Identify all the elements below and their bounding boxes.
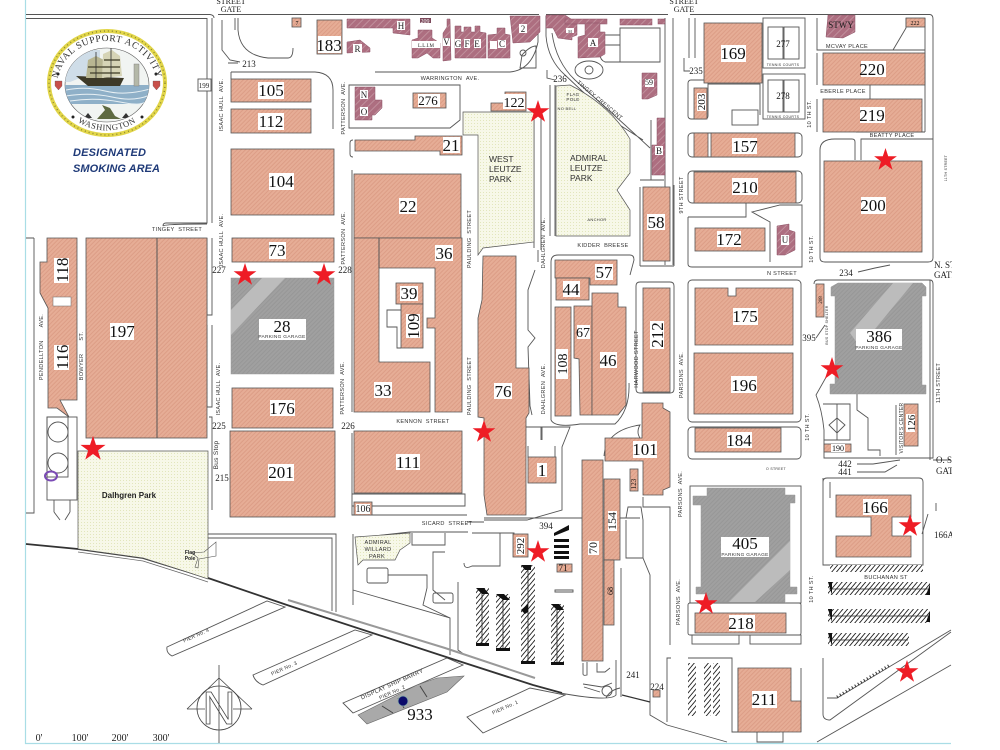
building number labels: 58: [648, 213, 664, 232]
building number labels: 209: [420, 19, 430, 25]
building number labels: 196: [731, 376, 757, 395]
building number labels: 108: [556, 354, 571, 374]
gate and facility callouts: 235: [689, 66, 703, 76]
gate and facility callouts: 225: [212, 421, 226, 431]
street labels: BOWYER ST.: [79, 332, 85, 380]
building number labels: 36: [436, 244, 452, 263]
street labels: POLE: [566, 97, 580, 102]
street labels: KENNON STREET: [396, 419, 450, 425]
parks: [78, 85, 630, 579]
gate and facility callouts: GATE: [221, 5, 241, 14]
street labels: 11TH STREET: [944, 154, 948, 181]
building number labels: 176: [269, 399, 295, 418]
gate and facility callouts: 395: [802, 333, 816, 343]
building number labels: 46: [600, 351, 616, 370]
gate and facility callouts: GATE: [674, 5, 694, 14]
building number labels: 166: [862, 498, 888, 517]
building number labels: 104: [268, 172, 294, 191]
park names: PARK: [369, 554, 385, 560]
parking garage 405: PARKING GARAGE: [721, 552, 769, 558]
street labels: TENNIS COURTS: [767, 63, 800, 67]
park names: Flag: [185, 550, 195, 556]
street labels: 11TH STREET: [936, 363, 942, 403]
gate and facility callouts: GATE: [934, 270, 957, 280]
title: designated smoking area: [73, 147, 160, 175]
historic building letters: R: [354, 44, 361, 54]
park names: Dalhgren Park: [102, 491, 157, 500]
historic building letters: V: [443, 37, 450, 47]
street labels: EBERLE PLACE: [820, 89, 866, 95]
building number labels: 278: [776, 91, 790, 101]
building number labels: 126: [906, 414, 918, 431]
park names: PARK: [489, 174, 512, 184]
gate and facility callouts: 441: [838, 467, 852, 477]
street labels: ANCHOR: [587, 217, 607, 222]
parking garage 28: [231, 278, 334, 374]
gate and facility callouts: 234: [839, 268, 853, 278]
building number labels: 106: [356, 504, 370, 515]
street labels: TENNIS COURTS: [767, 115, 800, 119]
piers and waterfront: [26, 544, 650, 733]
historic maroon buildings: [347, 15, 855, 255]
building number labels: 116: [53, 345, 72, 369]
street labels: PIER No. 4: [182, 627, 210, 644]
building number labels: 211: [752, 690, 776, 709]
Admiral Willard Park: [355, 533, 410, 565]
historic building letters: H: [398, 21, 405, 31]
park names: LEUTZE: [489, 164, 522, 174]
street labels: PATTERSON AVE.: [341, 211, 347, 265]
street labels: NO BELL: [558, 106, 577, 111]
building number labels: 200: [860, 196, 886, 215]
building number labels: 183: [316, 36, 342, 55]
building number labels: 218: [728, 614, 754, 633]
street labels: PARSONS AVE.: [678, 471, 684, 517]
street labels: BUS STOP SHELTER: [825, 305, 829, 345]
building number labels: 175: [732, 307, 758, 326]
parking garage 386: [830, 283, 926, 394]
purple marker: [45, 472, 57, 480]
street labels: MCVAY PLACE: [826, 44, 868, 50]
gate and facility callouts: [198, 0, 959, 692]
building number labels: 169: [720, 44, 746, 63]
parking garage 386: 386: [866, 327, 892, 346]
parking garage 28: PARKING GARAGE: [258, 334, 306, 340]
street labels: VISITOR'S CENTER: [899, 402, 905, 453]
building number labels: 70: [586, 542, 600, 554]
parking garage 405: 405: [732, 534, 758, 553]
seal: Naval Support Activity Washington: [47, 29, 167, 137]
street labels: DAHLGREN AVE.: [541, 363, 547, 414]
building number labels: 71: [558, 563, 568, 573]
street labels: TINGEY STREET: [152, 227, 202, 233]
building number labels: 277: [776, 39, 790, 49]
scale bar: 300': [153, 733, 170, 744]
historic building letters: M: [568, 29, 572, 34]
street labels: BUCHANAN ST: [864, 575, 908, 581]
building number labels: 68: [606, 587, 615, 595]
historic building letters: C: [499, 39, 505, 49]
street labels: DAHLGREN AVE.: [541, 217, 547, 268]
building number labels: 39: [400, 284, 418, 303]
street labels: O STREET: [766, 467, 787, 471]
building number labels: 118: [53, 258, 72, 282]
building number labels: 21: [442, 136, 460, 155]
building number labels: 57: [596, 263, 613, 282]
street labels: Bus Stop: [213, 441, 220, 469]
park names: [102, 153, 608, 568]
park names: WILLARD: [365, 547, 391, 553]
street labels: HARWOOD STREET: [634, 330, 640, 388]
gate and facility callouts: N. ST: [934, 260, 956, 270]
building number labels: 201: [268, 463, 294, 482]
street labels: PIER No. 3: [270, 660, 298, 677]
building number labels: 1: [538, 461, 546, 480]
building number labels: 190: [832, 444, 844, 453]
building number labels: 101: [632, 440, 658, 459]
parking lot hatching: [476, 525, 930, 716]
Admiral Leutze Park: [556, 85, 630, 236]
Dahlgren Park: [78, 451, 208, 579]
park names: LEUTZE: [570, 163, 603, 173]
West Leutze Park: [463, 112, 534, 255]
park names: ADMIRAL: [365, 540, 391, 546]
display ship Barry: 933: [407, 705, 433, 724]
historic building letters: O: [361, 107, 368, 117]
gate and facility callouts: 215: [215, 473, 229, 483]
building number labels: 73: [268, 241, 286, 260]
street labels: PAULDING STREET: [467, 357, 473, 415]
historic building letters: A: [590, 38, 597, 48]
gate and facility callouts: 228: [338, 265, 352, 275]
building number labels: 210: [732, 178, 758, 197]
historic building letters: E: [474, 39, 480, 49]
seal: Naval Support Activity Washington: WASHINGTON: [80, 117, 135, 130]
building number labels: 44: [562, 280, 580, 299]
street labels: PENDELLTON AVE.: [39, 314, 45, 380]
building number labels: 67: [576, 326, 590, 341]
building number labels: 109: [404, 313, 423, 339]
street labels: N STREET: [767, 271, 797, 277]
street labels: SICARD STREET: [422, 521, 473, 527]
display ship Barry: [358, 676, 464, 724]
parking garage 405: [693, 488, 797, 602]
scale bar: 100': [72, 733, 89, 744]
building number labels: 111: [396, 453, 420, 472]
building number labels: 112: [259, 112, 283, 131]
gate and facility callouts: 442: [838, 459, 852, 469]
gate and facility callouts: GATE: [936, 466, 959, 476]
historic building letters: U: [782, 235, 789, 245]
building number labels: 7: [296, 21, 298, 27]
scale bar: 200': [112, 733, 129, 744]
building number labels: 33: [374, 381, 392, 400]
gate and facility callouts: 199: [199, 82, 210, 90]
historic building letters: B: [656, 146, 662, 156]
scale bar: [36, 733, 170, 744]
seal: Naval Support Activity Washington: NAVAL SUPPORT ACTIVITY: [52, 34, 162, 78]
gate and facility callouts: 166A: [934, 530, 954, 540]
park names: ADMIRAL: [570, 153, 608, 163]
building number labels: 212: [648, 322, 667, 348]
street labels: PIER No. 1: [491, 699, 519, 716]
gate and facility callouts: 224: [650, 682, 664, 692]
street labels: WARRINGTON AVE.: [421, 76, 480, 82]
street labels: DISPLAY SHIP BARRY: [360, 668, 425, 701]
park names: Pole: [185, 556, 195, 562]
street labels: 10 TH ST.: [809, 235, 815, 263]
north arrow: N: [202, 682, 236, 734]
gate and facility callouts: 236: [553, 74, 567, 84]
building number labels: 154: [605, 512, 619, 530]
historic building letters: N: [361, 90, 368, 100]
street labels: PAULDING STREET: [467, 210, 473, 268]
building number labels: 123: [630, 478, 638, 489]
parking garage 386: PARKING GARAGE: [855, 345, 903, 351]
street labels: 10 TH ST.: [805, 413, 811, 441]
building number labels: 157: [732, 137, 758, 156]
building number labels: [53, 19, 920, 709]
historic building letters: [353, 20, 854, 245]
historic building letters: G: [455, 39, 462, 49]
gate and facility callouts: 394: [539, 521, 553, 531]
building number labels: 292: [515, 538, 527, 554]
parking garage 28: 28: [274, 317, 290, 336]
building number labels: 184: [726, 431, 752, 450]
gate and facility callouts: O. ST: [936, 455, 958, 465]
building number labels: 172: [716, 230, 742, 249]
street labels: FLAG: [567, 92, 580, 97]
gate and facility callouts: 226: [341, 421, 355, 431]
street labels: 10 TH ST.: [807, 100, 813, 128]
park names: PARK: [570, 173, 593, 183]
historic building letters: L.L.I.M: [418, 44, 435, 49]
building number labels: 219: [859, 106, 885, 125]
street labels: PARSONS AVE.: [679, 352, 685, 398]
title: designated smoking area: DESIGNATED: [73, 147, 146, 159]
historic building letters: 2: [521, 24, 525, 34]
street labels: 9TH STREET: [679, 176, 685, 214]
street labels: BEATTY PLACE: [870, 133, 914, 139]
building number labels: 122: [504, 96, 524, 111]
gate and facility callouts: 213: [242, 59, 256, 69]
historic building letters: 59: [645, 78, 653, 87]
gate and facility callouts: 227: [212, 265, 226, 275]
street labels: 10 TH ST.: [809, 575, 815, 603]
building number labels: 197: [109, 322, 135, 341]
building number labels: 203: [696, 93, 708, 110]
scale bar: 0': [36, 733, 43, 744]
building number labels: 105: [258, 81, 284, 100]
street labels: PATTERSON AVE.: [340, 361, 346, 415]
historic building letters: F: [464, 39, 470, 49]
designated smoking area stars: [80, 100, 921, 682]
building number labels: 222: [910, 21, 920, 27]
street labels: ISAAC HULL AVE.: [219, 78, 225, 131]
north arrow: [187, 665, 252, 743]
street labels: PIER No. 2: [378, 684, 406, 701]
building number labels: 208: [819, 296, 824, 304]
building number labels: 22: [400, 197, 416, 216]
street labels: ISAAC HULL AVE.: [219, 213, 225, 266]
street labels: TINGEY CRESCENT: [575, 80, 624, 122]
street labels: PARSONS AVE.: [676, 579, 682, 625]
street labels: ISAAC HULL AVE.: [216, 362, 222, 415]
gate and facility callouts: 241: [626, 670, 640, 680]
historic building letters: STWY: [828, 20, 854, 30]
building number labels: 220: [859, 60, 885, 79]
title: designated smoking area: SMOKING AREA: [73, 163, 160, 175]
building number labels: 276: [418, 93, 438, 108]
building number labels: 76: [494, 382, 512, 401]
street labels: KIDDER BREESE: [577, 243, 629, 249]
park names: WEST: [489, 154, 514, 164]
street labels: PATTERSON AVE.: [341, 81, 347, 135]
